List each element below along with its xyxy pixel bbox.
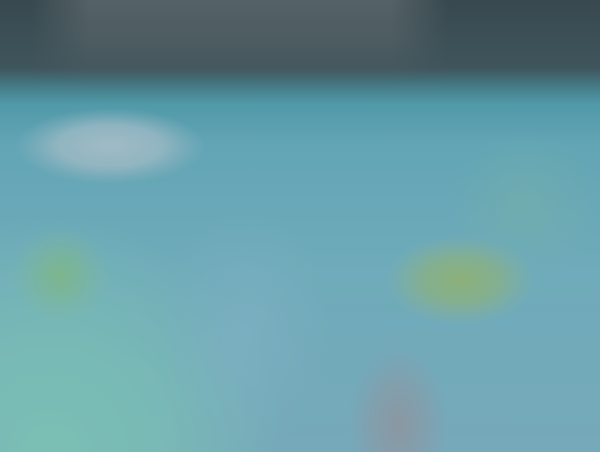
panel: grey top band <box>48 0 432 61</box>
green blob left <box>10 225 110 325</box>
panel: right green tint <box>450 130 600 280</box>
panel: lower left teal area <box>0 215 285 452</box>
white blob <box>15 108 205 184</box>
panel: centre blue area <box>160 210 330 452</box>
green blob right <box>385 235 535 325</box>
grey blob bottom <box>348 345 448 452</box>
